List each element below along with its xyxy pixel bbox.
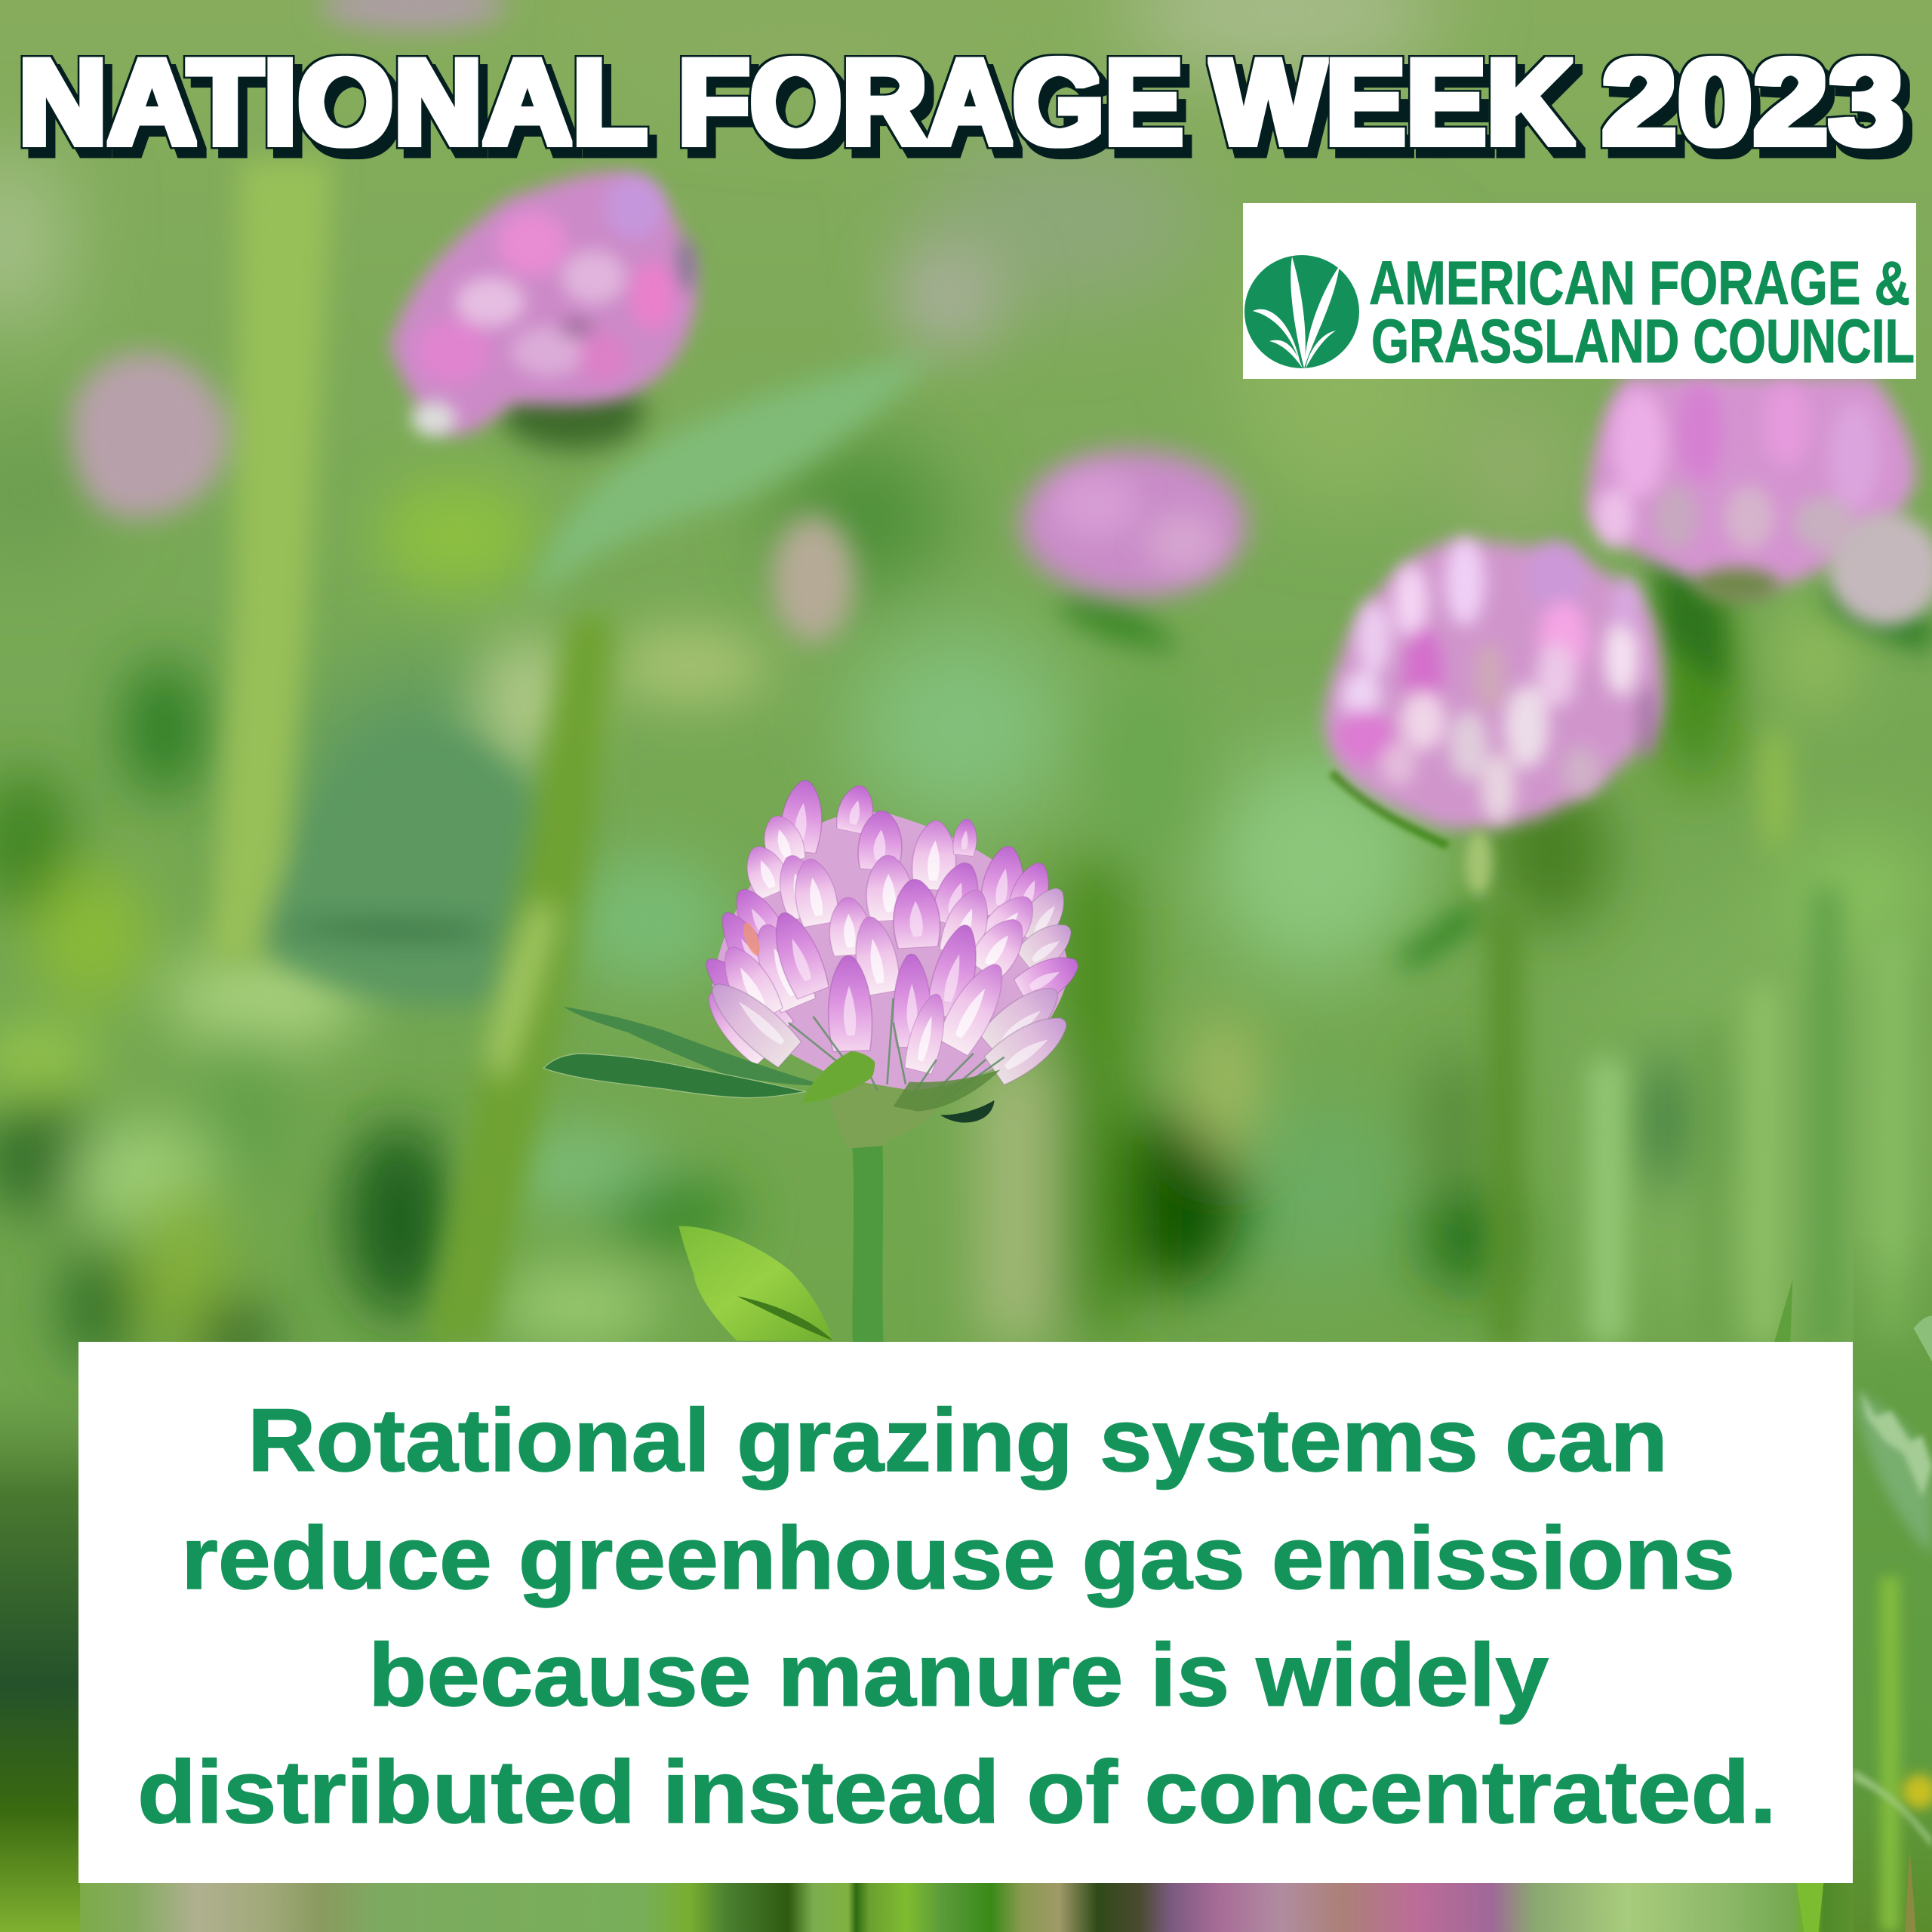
title xyxy=(18,34,1904,171)
icon: grass leaf in green circle xyxy=(1244,255,1359,368)
dark sepal xyxy=(940,1100,995,1122)
small bright leaf xyxy=(802,1051,875,1103)
clover head D xyxy=(1587,376,1916,602)
orange tints xyxy=(740,921,763,957)
lower narrow leaf xyxy=(543,1054,806,1098)
green sepal threads xyxy=(789,998,1004,1103)
clover head A xyxy=(389,172,697,450)
clover head F xyxy=(1829,512,1932,626)
clover head E xyxy=(1324,537,1663,894)
foreground clover flower xyxy=(543,778,1086,1343)
calyx xyxy=(829,1072,949,1149)
title word: NATIONAL: NATIONAL xyxy=(18,34,648,171)
stem xyxy=(851,1136,884,1343)
body line 3: because manure is widely xyxy=(368,1626,1549,1725)
bottom strip of blurred stems and flower xyxy=(0,1860,1932,1932)
lower leaf xyxy=(679,1226,833,1340)
left edge dark column xyxy=(0,1380,80,1932)
logo panel xyxy=(1243,203,1916,379)
title word: WEEK: WEEK xyxy=(1211,34,1574,171)
right edge grass column xyxy=(1774,1232,1932,1932)
blurred clover heads xyxy=(319,0,1932,894)
text panel xyxy=(78,1342,1853,1883)
body line 4: distributed instead of concentrated. xyxy=(137,1743,1777,1842)
clover head C xyxy=(1020,450,1247,598)
body line 2: reduce greenhouse gas emissions xyxy=(181,1509,1735,1608)
flower head xyxy=(694,778,1086,1112)
upper narrow leaf xyxy=(563,1007,814,1085)
title word: 2023: 2023 xyxy=(1601,34,1904,171)
body line 1: Rotational grazing systems can xyxy=(248,1391,1668,1491)
title word: FORAGE: FORAGE xyxy=(678,34,1183,171)
small grass blade below panel xyxy=(1796,1883,1823,1932)
